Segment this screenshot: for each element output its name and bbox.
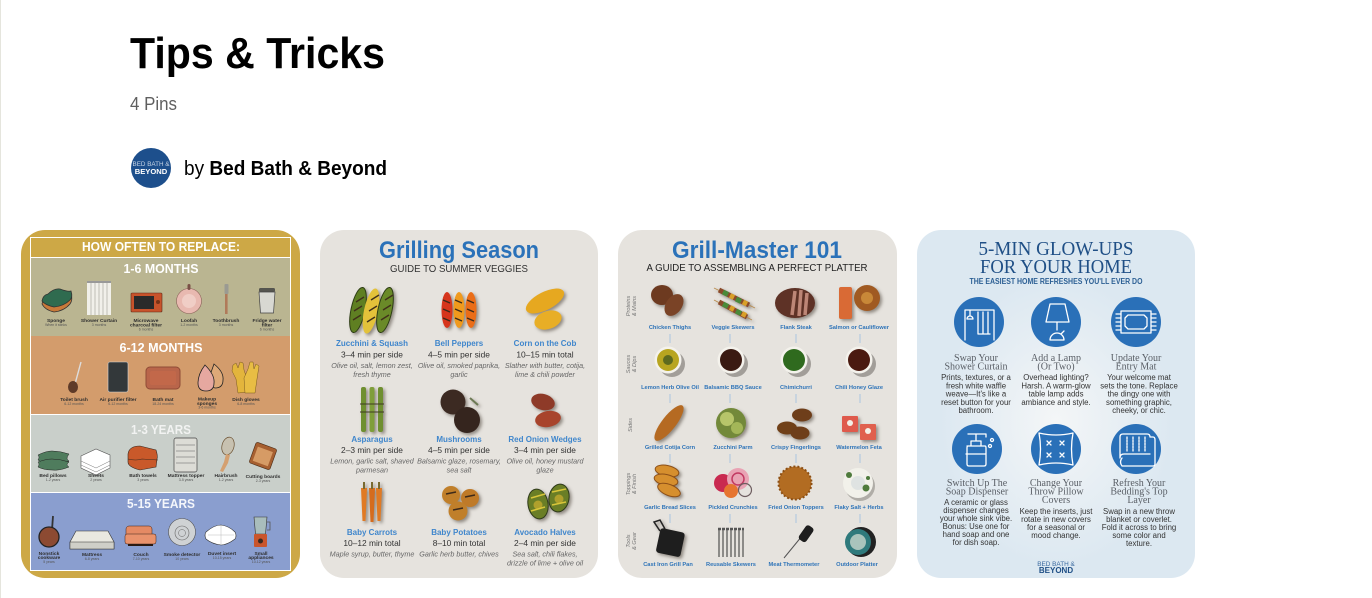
item: makeup sponges: Makeup: [198, 396, 216, 402]
item: baby potatoes: Baby Potatoes: [431, 528, 487, 537]
item: red onion wedges: glaze: [536, 466, 554, 474]
tip: soap dispenser: [940, 424, 1012, 547]
item: mushrooms: sea salt: [447, 466, 472, 474]
tip: lamp: ambiance and style.: [1021, 398, 1091, 407]
tip: entry mat: cheeky, or chic.: [1112, 406, 1166, 415]
item: air purifier filter: 6-12 months: [108, 402, 128, 406]
item: toilet brush: Toilet brush: [60, 397, 88, 403]
item: asparagus: Asparagus: [351, 435, 393, 444]
item: toothbrush: 3 months: [219, 323, 233, 327]
item: corn on the cob: Slather with butter, cotija,: [505, 361, 585, 370]
tip: lamp: Harsh. A warm-glow: [1021, 382, 1091, 390]
subheading: THE EASIEST HOME REFRESHES YOU'LL EVER DO: [970, 277, 1142, 286]
tip: bedding top layer: some color and: [1112, 531, 1166, 540]
item: chili honey glaze: [835, 346, 883, 391]
panel: 5-min glow-ups: [917, 230, 1195, 578]
avatar: Bed Bath & Beyond logo: [131, 148, 171, 188]
item: lemon herb olive oil: Lemon Herb Olive Oil: [641, 385, 699, 391]
row label: toppings & finish: & Finish: [632, 474, 638, 494]
item: mattress topper: 3-5 years: [179, 478, 194, 482]
subheading: GUIDE TO SUMMER VEGGIES: [390, 263, 528, 275]
item: smoke detector: 10 years: [175, 557, 189, 561]
row label: tools & gear: & Gear: [632, 531, 638, 550]
avatar: Bed Bath & Beyond logo: BEYOND: [135, 167, 168, 176]
item: cast iron grill pan: [643, 520, 693, 568]
item: red onion wedges: 3–4 min per side: [514, 445, 576, 455]
item: asparagus: [330, 387, 415, 474]
item: garlic bread slices: Garlic Bread Slices: [644, 505, 696, 511]
item: air purifier filter: [100, 362, 137, 406]
item: dish gloves: [232, 362, 260, 406]
tip: throw pillow: Change Your: [1030, 478, 1083, 489]
tip: bedding top layer: blanket or coverlet.: [1106, 515, 1172, 524]
item: salmon or cauliflower: [829, 285, 890, 331]
item: bell peppers: Olive oil, smoked paprika,: [418, 361, 500, 370]
item: nonstick cookware: Nonstick: [39, 551, 60, 557]
item: mattress: Mattress: [82, 552, 102, 558]
item: outdoor platter: [836, 527, 879, 568]
item: salmon or cauliflower: Salmon or Cauliflower: [829, 325, 890, 331]
item: bell peppers: 4–5 min per side: [428, 350, 490, 360]
item: shower curtain: Shower Curtain: [81, 318, 117, 324]
item: bed pillows: Bed pillows: [39, 473, 67, 479]
item: sheets: [81, 449, 110, 482]
item: duvet insert: Duvet insert: [208, 551, 237, 557]
item: toothbrush: [213, 284, 239, 327]
row label: sauces & dips: Sauces: [626, 355, 632, 373]
item: toilet brush: 6-12 months: [64, 402, 84, 406]
item: flaky salt + herbs: [834, 468, 884, 511]
item: dish gloves: 6-8 months: [237, 402, 255, 406]
item: air purifier filter: Air purifier filter: [100, 397, 137, 403]
tip: soap dispenser: for dish soap.: [953, 538, 999, 547]
item: cutting boards: 2-3 years: [256, 479, 271, 483]
item: zucchini & squash: Zucchini & Squash: [336, 339, 408, 348]
tip: entry mat: sets the tone. Replace: [1100, 382, 1178, 390]
item: crispy fingerlings: [771, 408, 821, 451]
item: small appliances: Small: [254, 551, 268, 557]
item: avocado halves: Sea salt, chili flakes,: [512, 550, 578, 558]
heading: 5-15 years: 5-15 YEARS: [127, 497, 195, 511]
panel: grill-master 101: [618, 230, 897, 578]
item: baby potatoes: [419, 486, 499, 558]
item: zucchini & squash: Olive oil, salt, lemon zest,: [331, 361, 413, 370]
item: small appliances: 10-12 years: [252, 560, 270, 564]
item: toilet brush: [60, 362, 88, 406]
item: red onion wedges: Olive oil, honey mustard: [506, 456, 585, 466]
tip: entry mat: the dingy one with: [1108, 390, 1170, 398]
item: mattress: 6-8 years: [85, 557, 100, 561]
item: fried onion toppers: [768, 466, 824, 511]
tip: bedding top layer: Refresh Your: [1113, 478, 1166, 489]
item: mattress: [70, 531, 114, 561]
logo: bed bath & beyond: BEYOND: [1039, 566, 1073, 575]
item: microwave: charcoal filter: [130, 322, 162, 328]
item: baby carrots: [330, 482, 414, 558]
item: bath mat: [146, 367, 180, 406]
item: nonstick cookware: cookware: [38, 555, 61, 561]
item: red onion wedges: Red Onion Wedges: [508, 435, 582, 444]
item: couch: 7-10 years: [133, 557, 150, 561]
item: makeup sponges: [197, 364, 223, 410]
item: chili honey glaze: Chili Honey Glaze: [835, 385, 883, 391]
item: veggie skewers: [712, 288, 755, 331]
item: fridge water filter: [252, 288, 282, 332]
item: fridge water filter: filter: [262, 322, 272, 328]
item: meat thermometer: [769, 524, 820, 568]
item: fridge water filter: Fridge water: [252, 318, 282, 324]
item: mattress topper: [168, 438, 204, 482]
item: watermelon feta: [836, 416, 883, 451]
tip: soap dispenser: Soap Dispenser: [946, 486, 1009, 498]
item: sponge: Sponge: [47, 318, 65, 324]
item: zucchini parm: [713, 408, 753, 451]
tip: entry mat: [1100, 297, 1178, 415]
item: couch: [125, 526, 156, 561]
item: garlic bread slices: [644, 463, 696, 511]
heading: 5-min glow-ups: FOR YOUR HOME: [980, 256, 1132, 278]
item: lemon herb olive oil: [641, 346, 699, 391]
tip: lamp: [1021, 297, 1091, 407]
item: red onion wedges: [506, 391, 585, 474]
item: small appliances: [248, 517, 274, 564]
tip: throw pillow: mood change.: [1031, 531, 1081, 540]
item: baby carrots: Baby Carrots: [347, 528, 398, 537]
item: corn on the cob: lime & chili powder: [515, 370, 576, 379]
item: hairbrush: 1-2 years: [219, 478, 234, 482]
item: cast iron grill pan: Cast Iron Grill Pan: [643, 562, 693, 568]
item: asparagus: Lemon, garlic salt, shaved: [330, 456, 415, 466]
item: couch: Couch: [133, 552, 149, 558]
heading: 6-12 months: 6-12 MONTHS: [120, 341, 202, 355]
item: flank steak: Flank Steak: [780, 325, 813, 331]
tip: entry mat: something graphic,: [1106, 398, 1172, 407]
item: duvet insert: [205, 525, 237, 560]
subheading: A GUIDE TO ASSEMBLING A PERFECT PLATTER: [646, 262, 868, 274]
item: watermelon feta: Watermelon Feta: [836, 445, 883, 451]
row label: proteins & mains: & Mains: [632, 296, 638, 316]
tip: soap dispenser: dispenser changes: [943, 506, 1009, 515]
tip: shower curtain: fresh white waffle: [946, 382, 1006, 390]
item: chicken thighs: Chicken Thighs: [649, 325, 691, 331]
tip: entry mat: Your welcome mat: [1107, 373, 1172, 382]
item: bath towels: 3 years: [137, 478, 149, 482]
tip: soap dispenser: Bonus: Use one for: [943, 522, 1010, 531]
tip: shower curtain: reset button for your: [941, 398, 1011, 407]
item: chimichurri: [780, 346, 812, 391]
title: Tips & Tricks: [130, 29, 385, 78]
tip: bedding top layer: [1102, 424, 1176, 548]
tip: lamp: Add a Lamp: [1031, 353, 1081, 364]
item: outdoor platter: Outdoor Platter: [836, 562, 879, 568]
tip: shower curtain: Shower Curtain: [944, 362, 1008, 372]
item: grilled cotija corn: [645, 401, 696, 451]
tip: shower curtain: weave—It's like a: [945, 390, 1007, 398]
item: microwave: Microwave: [133, 318, 159, 324]
item: sheets: Sheets: [88, 473, 104, 479]
item: microwave: 6 months: [139, 328, 153, 332]
item: asparagus: parmesan: [355, 466, 388, 474]
tip: bedding top layer: Swap in a new throw: [1103, 507, 1175, 516]
logo: bed bath & beyond: [1037, 561, 1075, 575]
item: zucchini & squash: 3–4 min per side: [341, 350, 403, 360]
pin count: 4 Pins: [130, 94, 177, 114]
item: loofah: 1-2 months: [180, 323, 198, 327]
item: mushrooms: 4–5 min per side: [428, 445, 490, 455]
tip: lamp: Overhead lighting?: [1023, 373, 1089, 382]
item: veggie skewers: Veggie Skewers: [712, 325, 754, 331]
item: bath mat: 18-24 months: [152, 402, 174, 406]
item: flaky salt + herbs: Flaky Salt + Herbs: [834, 505, 884, 511]
item: corn on the cob: Corn on the Cob: [514, 339, 576, 348]
heading: 1-6 months: 1-6 MONTHS: [124, 262, 198, 276]
item: fried onion toppers: Fried Onion Toppers: [768, 505, 824, 511]
item: cutting boards: [246, 442, 281, 483]
item: dish gloves: Dish gloves: [232, 397, 260, 403]
item: mushrooms: Balsamic glaze, rosemary,: [417, 456, 501, 466]
tip: bedding top layer: Bedding's Top: [1110, 486, 1168, 498]
item: avocado halves: Avocado Halves: [514, 528, 576, 537]
item: loofah: [176, 284, 202, 327]
tip: throw pillow: Covers: [1042, 495, 1070, 506]
logo: bed bath & beyond: BED BATH &: [1037, 561, 1075, 568]
item: chicken thighs: [649, 285, 691, 331]
tip: bedding top layer: texture.: [1126, 539, 1152, 548]
tip: soap dispenser: Switch Up The: [947, 478, 1008, 489]
item: bell peppers: Bell Peppers: [435, 339, 484, 348]
item: shower curtain: 3 months: [92, 323, 106, 327]
item: zucchini & squash: [331, 286, 413, 379]
item: bed pillows: [38, 451, 69, 482]
item: baby potatoes: 8–10 min total: [433, 538, 485, 548]
heading: 5-min glow-ups: [978, 238, 1134, 278]
item: pickled crunchies: Pickled Crunchies: [708, 505, 758, 511]
panel: grilling season: [320, 230, 598, 578]
item: toothbrush: Toothbrush: [213, 318, 239, 324]
item: bed pillows: 1-2 years: [46, 478, 61, 482]
tip: throw pillow: [1020, 424, 1093, 540]
heading: grilling season: Grilling Season: [379, 237, 539, 264]
heading: grill-master 101: Grill-Master 101: [672, 237, 842, 264]
tip: throw pillow: rotate in new covers: [1021, 515, 1091, 524]
tip: shower curtain: Swap Your: [954, 353, 999, 364]
item: bell peppers: garlic: [450, 370, 468, 379]
item: small appliances: appliances: [248, 555, 274, 561]
row label: tools & gear: Tools: [626, 534, 632, 548]
item: sponge: [42, 289, 72, 327]
avatar: Bed Bath & Beyond logo: BED BATH &: [133, 161, 170, 168]
row label: proteins & mains: Proteins: [626, 296, 632, 316]
row label: sauces & dips: & Dips: [632, 356, 638, 372]
item: fridge water filter: 6 months: [260, 328, 274, 332]
item: hairbrush: Hairbrush: [214, 473, 238, 479]
item: microwave: [130, 293, 162, 332]
byline: by Bed Bath & Beyond: [184, 157, 387, 180]
item: corn on the cob: 10–15 min total: [516, 350, 574, 360]
item: mattress topper: Mattress topper: [168, 473, 204, 479]
item: zucchini parm: Zucchini Parm: [713, 445, 753, 451]
item: flank steak: [775, 288, 815, 331]
item: sheets: 2 years: [90, 478, 102, 482]
item: avocado halves: [507, 482, 583, 568]
tip: soap dispenser: hand soap and one: [943, 530, 1009, 539]
heading: 5-min glow-ups: 5-MIN GLOW-UPS: [978, 238, 1134, 260]
item: baby potatoes: Garlic herb butter, chives: [419, 550, 499, 558]
item: makeup sponges: 3-6 months: [198, 406, 216, 410]
item: avocado halves: drizzle of lime + olive oil: [507, 558, 583, 568]
item: shower curtain: [81, 281, 117, 327]
item: reusable skewers: [706, 529, 756, 568]
item: corn on the cob: [505, 283, 585, 379]
heading: 1-3 years: 1-3 YEARS: [131, 423, 191, 437]
item: nonstick cookware: 5 years: [43, 560, 55, 564]
tip: bedding top layer: Layer: [1127, 495, 1151, 506]
item: baby carrots: 10–12 min total: [343, 538, 401, 548]
tip: lamp: table lamp adds: [1028, 390, 1084, 398]
row label: toppings & finish: Toppings: [626, 473, 632, 495]
tip: shower curtain: bathroom.: [958, 406, 994, 415]
panel: how often to replace: [21, 230, 300, 578]
item: duvet insert: 10-15 years: [213, 556, 231, 560]
item: nonstick cookware: [38, 516, 61, 564]
tip: throw pillow: for a seasonal or: [1027, 523, 1085, 532]
tip: entry mat: Entry Mat: [1116, 362, 1157, 372]
tip: throw pillow: Keep the inserts, just: [1020, 507, 1093, 516]
item: bath towels: [128, 446, 158, 482]
item: makeup sponges: sponges: [197, 402, 217, 407]
item: crispy fingerlings: Crispy Fingerlings: [771, 445, 821, 451]
item: grilled cotija corn: Grilled Cotija Corn: [645, 445, 696, 451]
item: smoke detector: [164, 518, 200, 561]
row label: sides: Sides: [628, 418, 634, 432]
item: pickled crunchies: [708, 468, 758, 511]
item: bath towels: Bath towels: [129, 473, 157, 479]
item: chimichurri: Chimichurri: [780, 385, 812, 391]
tip: throw pillow: Throw Pillow: [1028, 486, 1084, 498]
tip: shower curtain: [941, 297, 1012, 415]
item: cutting boards: Cutting boards: [246, 474, 281, 480]
item: bath mat: Bath mat: [153, 397, 174, 403]
item: sponge: When it stinks: [45, 323, 67, 327]
tip: shower curtain: Prints, textures, or a: [941, 373, 1012, 382]
item: balsamic bbq sauce: Balsamic BBQ Sauce: [704, 385, 762, 391]
item: meat thermometer: Meat Thermometer: [769, 562, 820, 568]
item: asparagus: 2–3 min per side: [341, 445, 403, 455]
item: smoke detector: Smoke detector: [164, 552, 200, 558]
item: zucchini & squash: fresh thyme: [353, 370, 391, 379]
item: bell peppers: [418, 292, 500, 379]
item: mushrooms: Mushrooms: [436, 435, 482, 444]
item: reusable skewers: Reusable Skewers: [706, 562, 756, 568]
heading: how often to replace: HOW OFTEN TO REPLACE:: [82, 239, 240, 254]
tip: lamp: (Or Two): [1037, 362, 1075, 372]
item: loofah: Loofah: [181, 318, 197, 324]
item: avocado halves: 2–4 min per side: [514, 538, 576, 548]
item: mushrooms: [417, 390, 501, 474]
item: baby carrots: Maple syrup, butter, thyme: [330, 550, 414, 558]
item: hairbrush: [214, 436, 238, 482]
item: balsamic bbq sauce: [704, 346, 762, 391]
tip: bedding top layer: Fold it across to bring: [1102, 523, 1176, 532]
tip: soap dispenser: A ceramic or glass: [944, 498, 1008, 507]
tip: entry mat: Update Your: [1111, 353, 1162, 364]
tip: soap dispenser: your whole sink vibe.: [940, 514, 1012, 523]
